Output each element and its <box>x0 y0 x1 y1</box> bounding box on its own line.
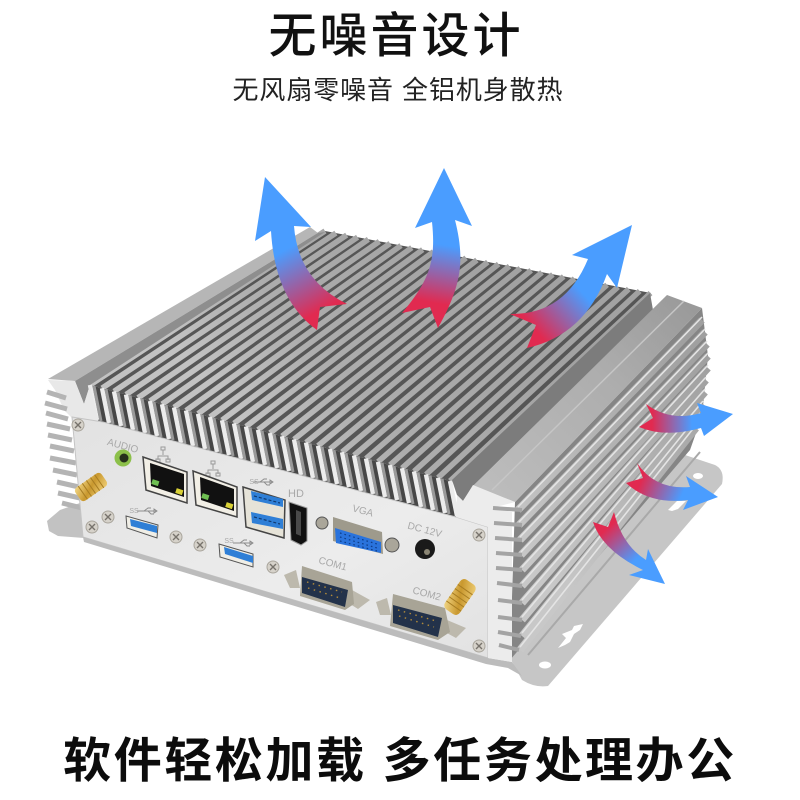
LAN port 1 <box>143 447 187 503</box>
VGA port: VGA <box>351 503 375 520</box>
DC power jack: DC 12V <box>406 521 443 540</box>
arrow: side lower airflow <box>593 512 665 584</box>
subtitle: 无风扇零噪音 全铝机身散热 <box>233 75 563 105</box>
left chamfer corner <box>48 380 99 423</box>
right panel corner with fin teeth <box>456 485 522 662</box>
LAN port 2 <box>193 461 237 517</box>
audio jack <box>106 437 140 466</box>
USB port middle <box>219 538 253 567</box>
right mounting flange <box>510 452 723 686</box>
right antenna connector <box>442 577 478 617</box>
left top rail <box>48 227 325 404</box>
top heat-sink fins <box>90 231 651 481</box>
front panel <box>72 417 488 658</box>
HDMI port: HD <box>288 488 304 500</box>
left mounting flange <box>47 503 84 538</box>
left antenna connector <box>73 471 109 503</box>
HDMI port <box>288 488 307 545</box>
arrow: top centre airflow <box>402 168 472 328</box>
USB port left: SS <box>129 508 139 515</box>
title: 无噪音设计 <box>268 10 524 63</box>
fin front ends <box>90 385 460 518</box>
VGA port <box>316 503 399 554</box>
arrow: top left airflow <box>255 177 347 330</box>
DC power jack <box>406 521 443 559</box>
left side fins <box>45 392 82 508</box>
arrow: top right airflow <box>510 225 632 348</box>
right rail slope <box>452 293 653 501</box>
right top rail <box>473 295 702 502</box>
COM2 port <box>376 585 466 640</box>
COM2 port: COM2 <box>411 585 442 604</box>
mini PC device <box>45 227 723 686</box>
COM1 port <box>284 555 370 610</box>
USB port left <box>126 508 158 538</box>
stacked USB ports <box>243 479 285 538</box>
USB port middle: SS <box>224 538 234 545</box>
arrow: side middle airflow <box>626 463 718 510</box>
arrow: side upper airflow <box>639 403 733 436</box>
audio jack: AUDIO <box>106 437 140 456</box>
panel bottom edge <box>83 537 522 676</box>
stacked USB ports: SS <box>249 479 259 486</box>
panel screws <box>72 419 485 652</box>
right side cooling fins <box>510 308 708 660</box>
bottom slogan: 软件轻松加载 多任务处理办公 <box>63 735 737 788</box>
COM1 port: COM1 <box>317 555 348 574</box>
